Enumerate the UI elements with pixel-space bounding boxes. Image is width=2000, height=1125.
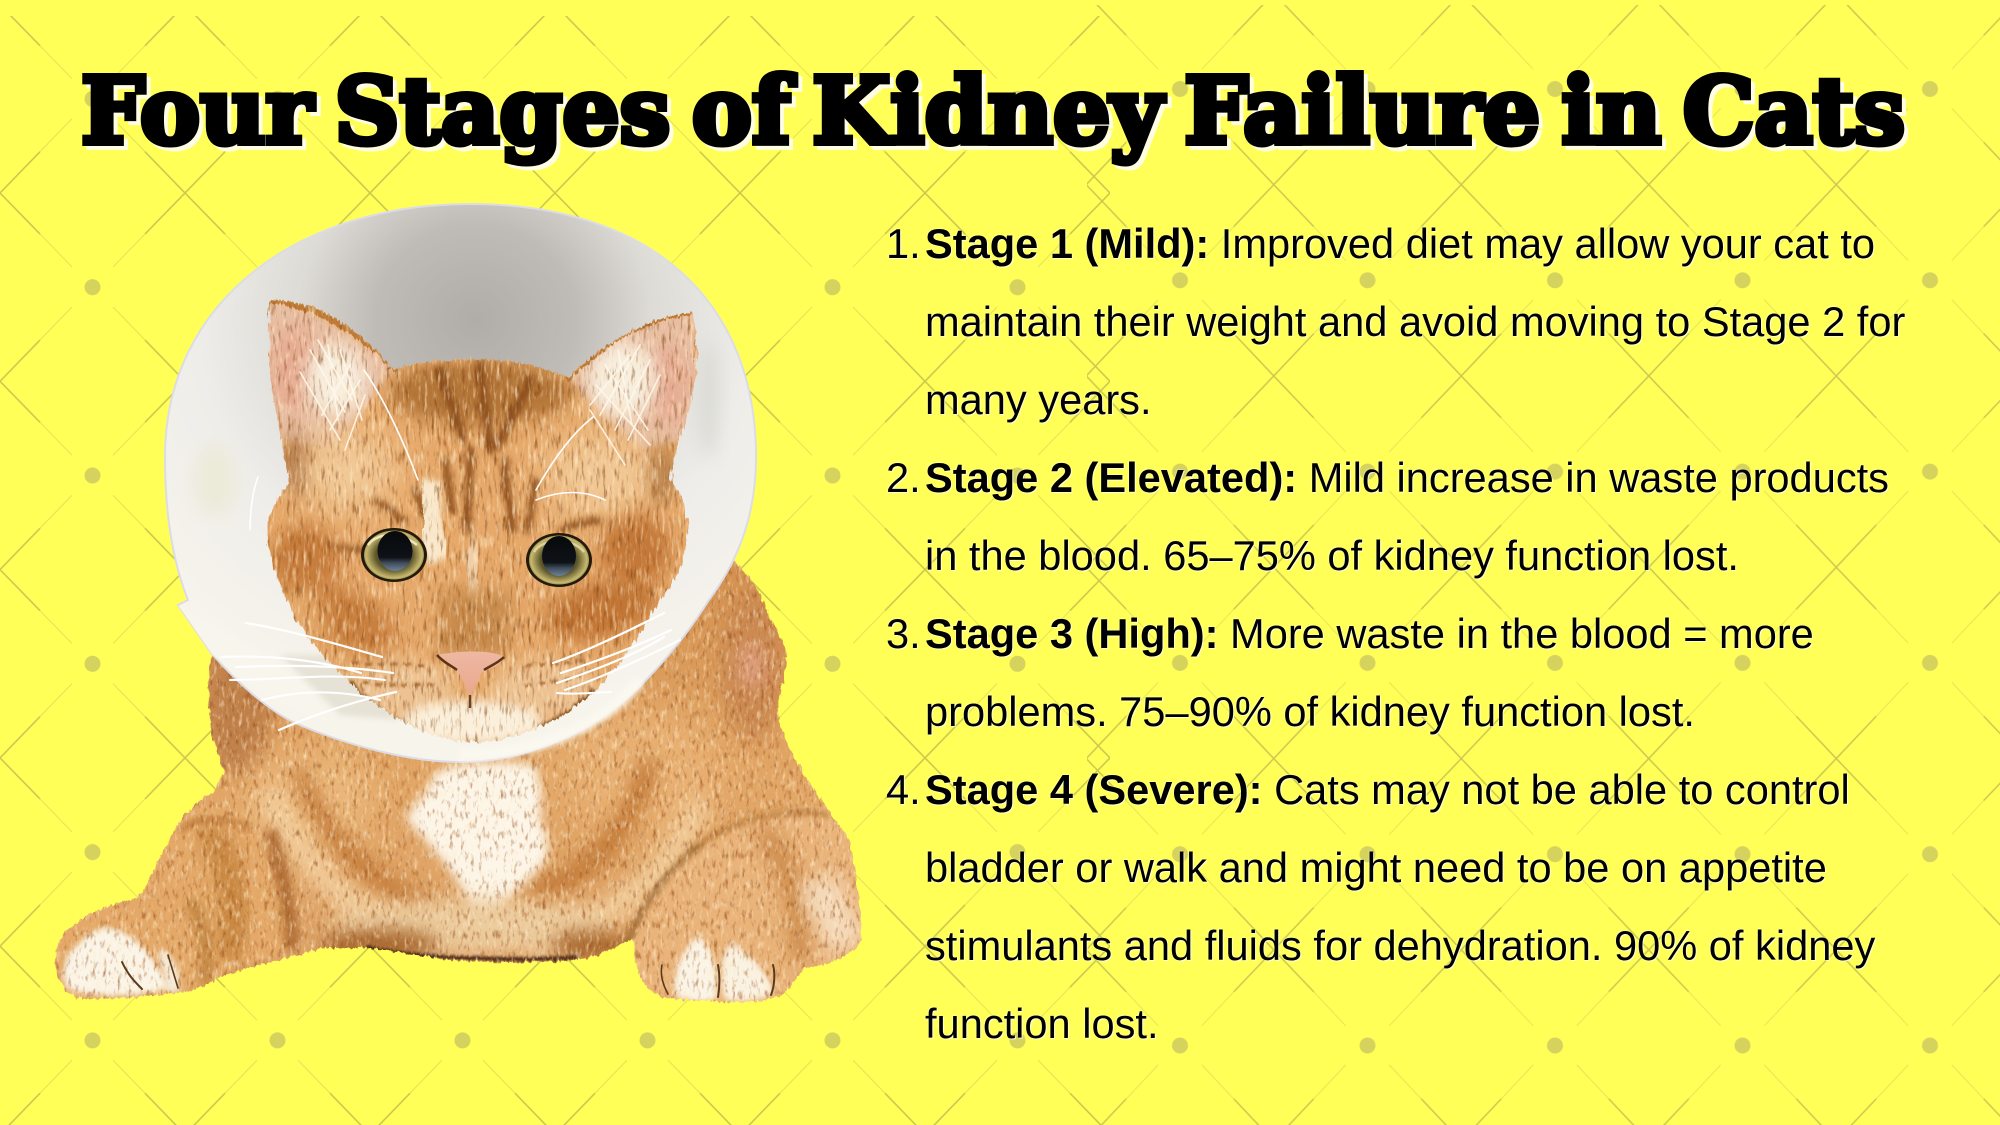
chin <box>402 700 542 744</box>
nose <box>437 651 504 708</box>
stage 2: in the blood. 65–75% of kidney function lost. <box>925 532 1739 579</box>
stage 1 <box>886 220 1906 424</box>
cone collar <box>165 204 756 762</box>
cat head <box>221 290 710 760</box>
stage 4: function lost. <box>925 1000 1159 1047</box>
cat body and front legs <box>54 561 862 1004</box>
dark tabby arcs on chest <box>298 770 430 905</box>
stage 1: many years. <box>925 376 1152 423</box>
stage 4: Stage 4 (Severe): Cats may not be able to control <box>925 766 1850 813</box>
stage 4: stimulants and fluids for dehydration. 90% of kidney <box>925 922 1875 969</box>
stage 3: Stage 3 (High): More waste in the blood = more <box>925 610 1814 657</box>
stage 1: 1. <box>886 220 921 267</box>
shadow at right of cone interior <box>698 340 718 460</box>
stage 2 <box>886 454 1889 580</box>
stage 3 <box>886 610 1814 736</box>
forehead top <box>388 360 572 424</box>
ear base dark <box>284 435 312 495</box>
title: Four Stages of Kidney Failure in Cats <box>81 57 1905 165</box>
stage 3: 3. <box>886 610 921 657</box>
stage 2: Stage 2 (Elevated): Mild increase in waste products <box>925 454 1889 501</box>
white chest patch <box>405 762 548 930</box>
ear tufts <box>300 340 660 465</box>
stage 4: bladder or walk and might need to be on appetite <box>925 844 1827 891</box>
left leg <box>55 820 216 992</box>
tabby stripes <box>325 365 600 549</box>
whiskers <box>221 370 680 730</box>
cheeks <box>271 524 339 596</box>
muzzle <box>346 660 454 720</box>
right eye <box>526 533 592 587</box>
ears <box>267 300 393 450</box>
cone left lower fold <box>178 605 330 722</box>
nose bridge <box>438 590 512 655</box>
left eye <box>361 528 427 582</box>
stage 4 <box>886 766 1876 1047</box>
stage 1: Stage 1 (Mild): Improved diet may allow your cat to <box>925 220 1875 267</box>
cone rim bottom shine <box>459 680 640 755</box>
toes right paw <box>675 936 716 1001</box>
body shading <box>204 635 272 775</box>
stage 4: 4. <box>886 766 921 813</box>
illustration: orange cat wearing a cone collar <box>54 70 1908 1004</box>
stage 1: maintain their weight and avoid moving to Stage 2 for <box>925 298 1905 345</box>
forehead centre light streak <box>428 480 440 560</box>
numbered list of stages <box>886 220 1906 1047</box>
right leg <box>634 806 861 1002</box>
dark under-cheek contour <box>350 682 414 727</box>
forehead light sides <box>295 430 395 510</box>
stage 3: problems. 75–90% of kidney function lost. <box>925 688 1695 735</box>
paw toe lines <box>122 955 774 997</box>
toes left paw <box>63 928 168 996</box>
belly <box>330 899 610 951</box>
stage 2: 2. <box>886 454 921 501</box>
